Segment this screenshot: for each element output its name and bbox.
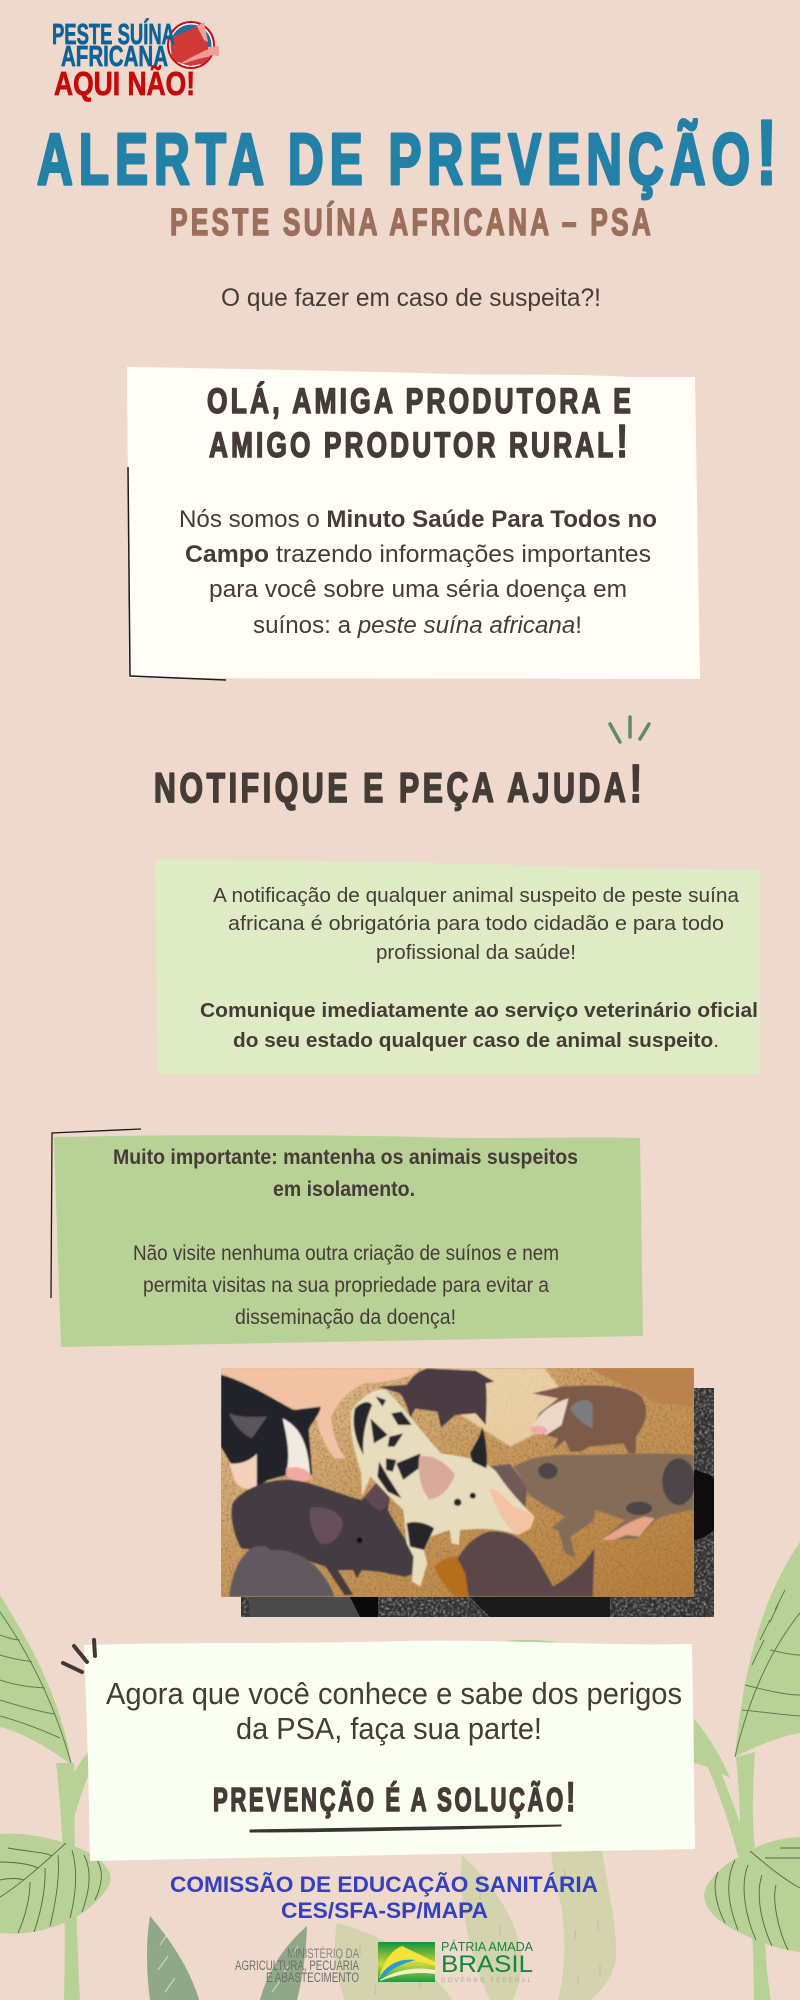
decorative leaves: bottom foliage — [147, 1640, 616, 2000]
notification text: profissional da saúde! — [376, 942, 576, 964]
leaf: left large — [0, 1595, 72, 1765]
pig: black and white — [221, 1375, 321, 1490]
bold text: em isolamento. — [273, 1178, 415, 1201]
photo shadow — [241, 1388, 714, 1617]
ground — [221, 1368, 694, 1597]
leaf: right round — [704, 1837, 800, 1952]
logo: ministry: E ABASTECIMENTO — [266, 1970, 359, 1985]
slogan: PREVENÇÃO É A SOLUÇÃO! — [213, 1773, 578, 1820]
leaf: bottom olive right column — [551, 1850, 616, 2000]
pig: brown large right — [488, 1454, 695, 1558]
question line: O que fazer em caso de suspeita?! — [221, 284, 601, 312]
leaf veins: left round — [0, 1843, 101, 1933]
dirt corner — [589, 1368, 694, 1407]
heading — [207, 381, 634, 467]
regular text: permita visitas na sua propriedade para evitar a — [143, 1274, 549, 1297]
regular text — [133, 1242, 559, 1329]
panel: notification — [155, 859, 760, 1074]
notification text: A notificação de qualquer animal suspeito de peste suína — [213, 885, 740, 907]
stem: left branch — [60, 1752, 90, 1830]
leaf veins: right large — [735, 1590, 800, 1757]
bold text — [113, 1146, 578, 1201]
leaf: right small behind card — [694, 1719, 730, 1778]
pig: brown dark bottom centre — [453, 1531, 594, 1597]
leaf: small behind card top — [485, 1640, 578, 1646]
call to action text: Agora que você conhece e sabe dos perigos — [106, 1676, 682, 1711]
leaf: right large — [735, 1542, 800, 1757]
puddle — [434, 1556, 469, 1597]
panel background — [54, 1135, 643, 1347]
bright straw patch — [420, 1368, 560, 1448]
pig: small dark — [379, 1368, 494, 1427]
regular text: disseminação da doença! — [235, 1306, 456, 1329]
stem: left plant — [56, 1763, 80, 2000]
call to action text: da PSA, faça sua parte! — [236, 1711, 542, 1746]
card background — [127, 367, 700, 679]
logo: Pátria Amada Brasil — [378, 1939, 533, 1984]
leaf: bottom olive centre — [335, 1923, 452, 2000]
bold text: Muito importante: mantenha os animais suspeitos — [113, 1146, 578, 1169]
call to action text — [106, 1676, 682, 1746]
regular text: Não visite nenhuma outra criação de suínos e nem — [133, 1242, 559, 1265]
corner line — [128, 467, 226, 680]
pig: gray bottom left — [229, 1546, 334, 1597]
logo: ministry: MINISTÉRIO DA — [287, 1946, 359, 1961]
logo text line 1: PESTE SUÍNA — [52, 17, 175, 51]
leaf: dark sage centre — [260, 1926, 307, 2000]
stem: right lower — [752, 1930, 771, 2000]
panel background — [84, 1641, 695, 1861]
stem: right upper — [736, 1752, 756, 1856]
body text — [179, 506, 657, 639]
credit: commission — [170, 1872, 598, 1923]
leaf: dark sage left — [147, 1916, 199, 2000]
leaf: bottom olive tall — [461, 1855, 522, 2000]
logo: Peste Suína Africana Aqui Não — [52, 17, 219, 102]
panel background — [155, 859, 760, 1074]
notification text — [213, 885, 740, 964]
pig: pink — [221, 1368, 419, 1458]
panel: isolation — [51, 1129, 643, 1347]
body text: suínos: a peste suína africana! — [253, 612, 582, 639]
bold instruction: Comunique imediatamente ao serviço veterinário oficial — [200, 1000, 758, 1022]
pig: spotted centre — [351, 1389, 535, 1587]
pig ear — [419, 1456, 455, 1499]
icon: dark spark ticks — [63, 1640, 95, 1672]
gravel texture — [221, 1368, 694, 1597]
body text: para você sobre uma séria doença em — [209, 576, 627, 603]
body text: Campo trazendo informações importantes — [185, 541, 651, 568]
heading: OLÁ, AMIGA PRODUTORA E — [207, 381, 634, 421]
pig: dark foreground — [232, 1468, 419, 1595]
bold instruction: do seu estado qualquer caso de animal suspeito . — [233, 1030, 719, 1052]
panel: greeting card — [127, 367, 700, 680]
photo: pigs on the ground — [221, 1368, 695, 1597]
plant: right — [694, 1542, 800, 2000]
pig spots — [354, 1397, 487, 1550]
text: patria amada: PÁTRIA AMADA — [441, 1939, 533, 1954]
text: brasil: BRASIL — [441, 1951, 533, 1978]
leaf: left round — [0, 1834, 111, 1934]
underline — [250, 1825, 561, 1832]
leaf veins: pale dashes — [158, 1933, 298, 1992]
logo: ministry — [235, 1946, 359, 1985]
text: governo federal: GOVERNO FEDERAL — [441, 1978, 533, 1984]
leaf veins: right round — [715, 1848, 800, 1950]
pig snout — [489, 1489, 535, 1535]
credit: commission: COMISSÃO DE EDUCAÇÃO SANITÁRIA — [170, 1872, 598, 1897]
notification text: africana é obrigatória para todo cidadão e para todo — [228, 913, 724, 935]
bold instruction — [200, 1000, 758, 1052]
stem: right branch — [708, 1760, 750, 1856]
pig: brown top right — [531, 1386, 646, 1453]
flag — [378, 1942, 435, 1982]
heading: notifique: NOTIFIQUE E PEÇA AJUDA! — [154, 754, 646, 814]
logo icon: magnifier with pig — [168, 22, 219, 68]
leaf veins: left large — [0, 1612, 71, 1763]
credit: commission: CES/SFA-SP/MAPA — [281, 1898, 488, 1923]
logo text line 3: AQUI NÃO! — [54, 65, 195, 102]
body text: Nós somos o Minuto Saúde Para Todos no — [179, 506, 657, 533]
icon: green spark ticks — [610, 717, 649, 742]
logo text line 2: AFRICANA — [61, 41, 168, 73]
logo: ministry: AGRICULTURA, PECUÁRIA — [235, 1958, 359, 1973]
plant: left — [0, 1595, 111, 2000]
panel: call to action — [63, 1640, 695, 1861]
heading: AMIGO PRODUTOR RURAL! — [209, 415, 631, 467]
corner line — [51, 1129, 141, 1298]
